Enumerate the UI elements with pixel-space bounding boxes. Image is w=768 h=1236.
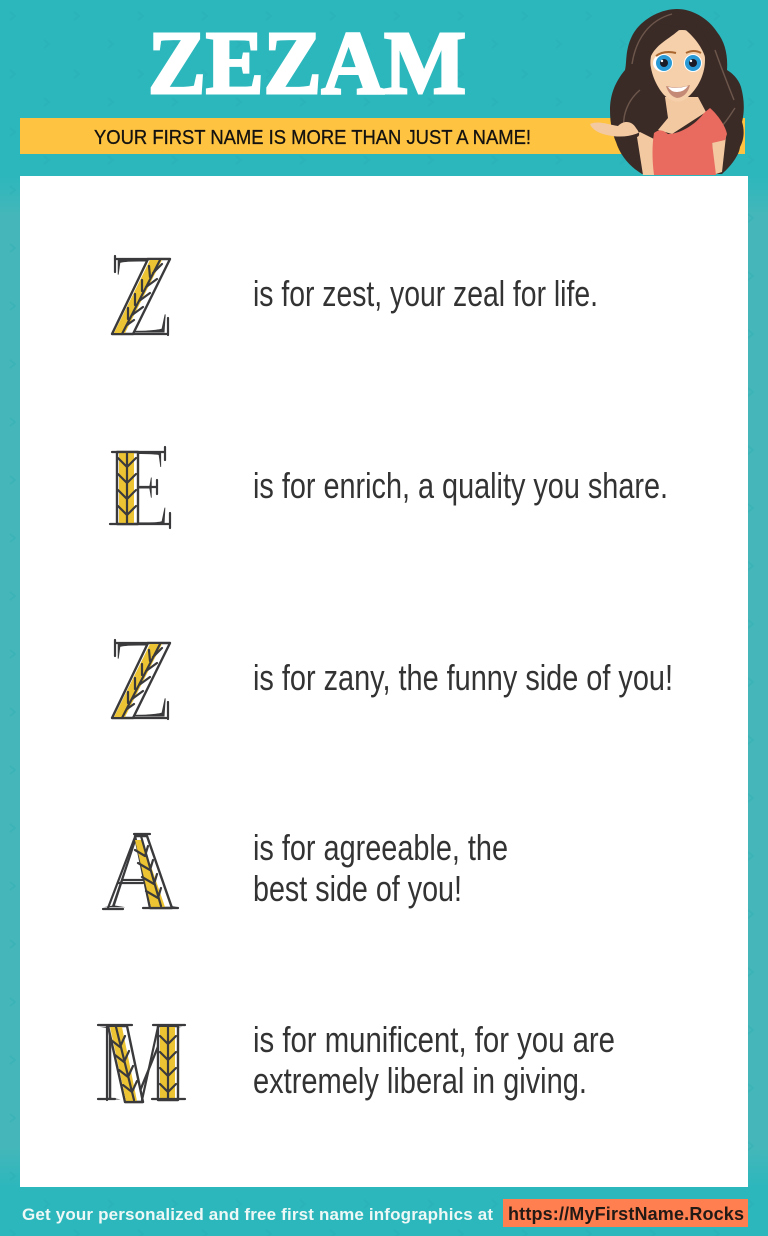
text lines: extremely liberal in giving.	[253, 1060, 587, 1101]
letter M: M	[96, 999, 186, 1127]
right eye	[684, 54, 702, 72]
text line: is for zest, your zeal for life.	[253, 273, 598, 314]
letter A: A	[102, 807, 180, 935]
banner	[20, 118, 745, 154]
neck and chest	[658, 97, 706, 134]
letter Z: Z	[108, 616, 173, 744]
footer url badge: https://MyFirstName.Rocks	[508, 1204, 744, 1224]
text line: is for zany, the funny side of you!	[253, 657, 673, 698]
shirt	[652, 108, 727, 175]
panel: letters	[20, 176, 748, 1187]
row: Z for zest	[108, 232, 598, 360]
text lines: is for munificent, for you are	[253, 1019, 615, 1060]
icon: woman illustration	[590, 9, 744, 175]
text lines	[253, 827, 508, 909]
banner: YOUR FIRST NAME IS MORE THAN JUST A NAME!	[94, 127, 531, 149]
text lines: is for agreeable, the	[253, 827, 508, 868]
text line: is for enrich, a quality you share.	[253, 465, 668, 506]
arm and hand	[590, 122, 656, 175]
row: A for agreeable	[102, 807, 508, 935]
hair	[610, 9, 744, 174]
right arm	[712, 136, 726, 175]
row: M for munificent	[96, 999, 615, 1127]
footer text: Get your personalized and free first name infographics at	[22, 1205, 493, 1224]
footer url badge	[503, 1199, 748, 1227]
face	[650, 30, 705, 102]
eyebrows	[656, 51, 701, 56]
text lines: best side of you!	[253, 868, 462, 909]
letter Z: Z	[108, 232, 173, 360]
letter E: E	[108, 424, 172, 552]
row: Z for zany	[108, 616, 673, 744]
text lines	[253, 1019, 615, 1101]
hair front lock	[638, 24, 712, 88]
hair highlights	[624, 14, 735, 130]
title: ZEZAM	[148, 14, 466, 113]
mouth	[666, 85, 690, 98]
row: E for enrich	[108, 424, 668, 552]
left eye	[653, 54, 673, 72]
